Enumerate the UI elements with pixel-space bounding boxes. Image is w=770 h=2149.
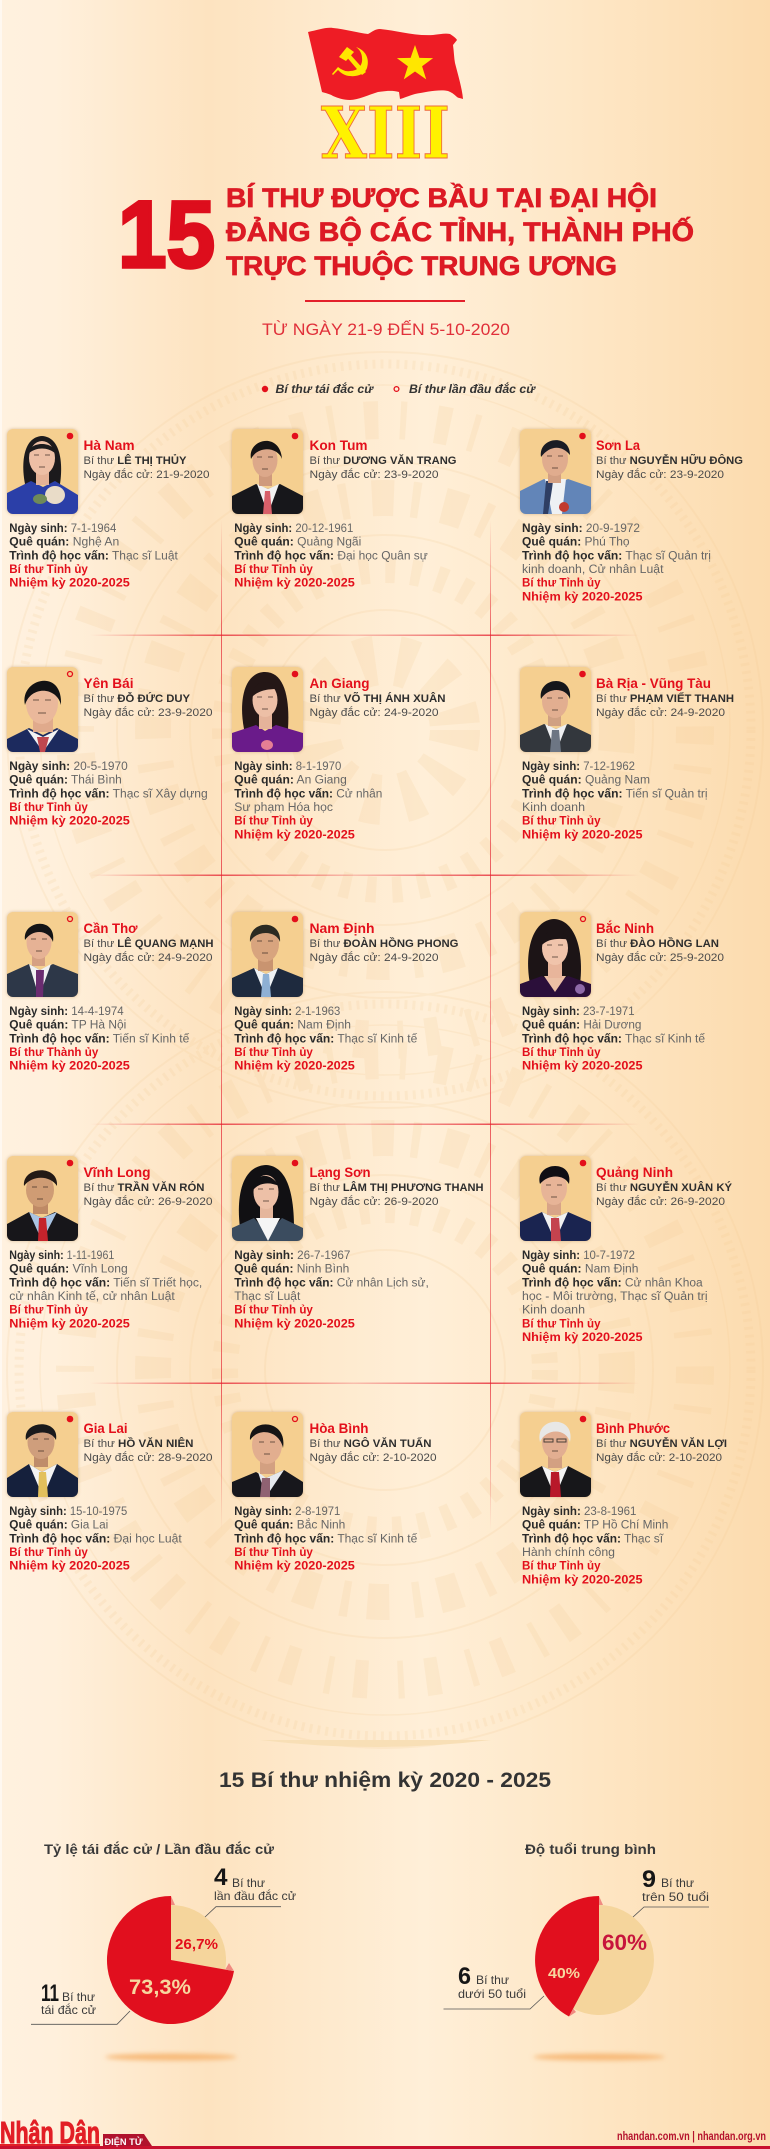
name and election date bbox=[310, 1437, 436, 1464]
biography bbox=[9, 1250, 202, 1330]
biography: học - Môi trường, Thạc sĩ Quản trị bbox=[522, 1291, 708, 1303]
biography: Nhiệm kỳ 2020-2025 bbox=[522, 1061, 643, 1073]
biography: Nhiệm kỳ 2020-2025 bbox=[522, 1574, 643, 1586]
biography: Bí thư Tỉnh ủy bbox=[522, 578, 601, 590]
biography: Quê quán: TP Hà Nội bbox=[9, 1020, 126, 1032]
tab: Điện tử: ĐIỆN TỬ bbox=[104, 2136, 143, 2147]
biography: Nhiệm kỳ 2020-2025 bbox=[522, 591, 643, 603]
biography: Bí thư Tỉnh ủy bbox=[9, 1547, 88, 1559]
biography: Ngày sinh: 1-11-1961 bbox=[9, 1250, 114, 1262]
legend: Bí thư lần đầu đắc cử bbox=[409, 381, 536, 396]
province: Bà Rịa - Vũng Tàu bbox=[596, 675, 711, 691]
card: Nam Định bbox=[232, 912, 459, 1073]
chart heading: Độ tuổi trung bình bbox=[525, 1841, 656, 1857]
name and election date bbox=[84, 454, 210, 481]
biography: Quê quán: Nam Định bbox=[522, 1264, 638, 1276]
photo bbox=[232, 912, 303, 997]
name and election date: Ngày đắc cử: 26-9-2020 bbox=[596, 1195, 725, 1208]
callout: 11 re-elected: 11 bbox=[41, 1980, 59, 2007]
card: Vĩnh Long bbox=[7, 1156, 212, 1330]
callout: 9 over 50: 9 bbox=[642, 1866, 656, 1893]
biography: Nhiệm kỳ 2020-2025 bbox=[234, 578, 355, 590]
biography: Bí thư Tỉnh ủy bbox=[9, 802, 88, 814]
province: Kon Tum bbox=[310, 437, 368, 453]
name and election date: Bí thư ĐOÀN HỒNG PHONG bbox=[310, 937, 459, 950]
name and election date: Ngày đắc cử: 24-9-2020 bbox=[310, 951, 438, 964]
statistics heading: 15 Bí thư nhiệm kỳ 2020 - 2025 bbox=[219, 1769, 551, 1792]
biography: Trình độ học vấn: Thạc sĩ Luật bbox=[9, 550, 179, 562]
biography: Bí thư Tỉnh ủy bbox=[234, 1547, 313, 1559]
biography: Quê quán: Bắc Ninh bbox=[234, 1519, 345, 1532]
biography: Trình độ học vấn: Đại học Quân sự bbox=[234, 550, 428, 562]
biography bbox=[522, 1250, 708, 1344]
name and election date: Ngày đắc cử: 24-9-2020 bbox=[84, 951, 212, 964]
legend bbox=[262, 381, 536, 396]
callout: 11 re-elected bbox=[31, 1980, 130, 2024]
name and election date: Bí thư HỒ VĂN NIÊN bbox=[84, 1437, 194, 1450]
logo: party flag and XIII bbox=[308, 28, 463, 175]
biography: Nhiệm kỳ 2020-2025 bbox=[9, 1061, 130, 1073]
biography: Trình độ học vấn: Tiến sĩ Quản trị bbox=[522, 788, 708, 800]
card: Bắc Ninh bbox=[520, 912, 724, 1073]
callout: 6 under 50: 6 bbox=[458, 1963, 471, 1990]
biography: Quê quán: Thái Bình bbox=[9, 775, 122, 787]
icon: star bbox=[397, 45, 433, 79]
name and election date bbox=[596, 937, 724, 964]
biography: Ngày sinh: 23-7-1971 bbox=[522, 1006, 634, 1018]
biography bbox=[9, 523, 179, 590]
biography: Bí thư Tỉnh ủy bbox=[234, 1047, 313, 1059]
chart heading: Tỷ lệ tái đắc cử / Lần đầu đắc cử bbox=[44, 1840, 275, 1857]
biography: Trình độ học vấn: Cử nhân Khoa bbox=[522, 1278, 703, 1290]
biography bbox=[522, 1006, 706, 1073]
biography: Kinh doanh bbox=[522, 802, 585, 814]
biography: Nhiệm kỳ 2020-2025 bbox=[234, 1318, 355, 1330]
name and election date: Bí thư NGUYỄN HỮU ĐÔNG bbox=[596, 454, 743, 467]
biography bbox=[234, 1506, 418, 1573]
biography: Bí thư Tỉnh ủy bbox=[234, 816, 313, 828]
province: Bắc Ninh bbox=[596, 919, 654, 936]
biography: Bí thư Tỉnh ủy bbox=[522, 816, 601, 828]
biography: Nhiệm kỳ 2020-2025 bbox=[9, 816, 130, 828]
icon: flag bbox=[308, 28, 463, 100]
pie chart: 73,3% bbox=[129, 1976, 191, 1999]
biography: Trình độ học vấn: Thạc sĩ Quản trị bbox=[522, 550, 711, 562]
province: An Giang bbox=[310, 675, 370, 691]
biography: Bí thư Thành ủy bbox=[9, 1047, 99, 1059]
name and election date: Ngày đắc cử: 23-9-2020 bbox=[596, 468, 724, 481]
biography: Trình độ học vấn: Thạc sĩ Kinh tế bbox=[234, 1534, 418, 1546]
name and election date: Ngày đắc cử: 23-9-2020 bbox=[310, 468, 438, 481]
pie chart: 60% bbox=[602, 1930, 647, 1955]
biography: Trình độ học vấn: Thạc sĩ bbox=[522, 1534, 664, 1546]
province: Lạng Sơn bbox=[310, 1164, 370, 1180]
biography: Nhiệm kỳ 2020-2025 bbox=[522, 829, 643, 841]
biography: Ngày sinh: 20-9-1972 bbox=[522, 523, 640, 535]
province: Quảng Ninh bbox=[596, 1164, 673, 1180]
name and election date: Bí thư PHẠM VIẾT THANH bbox=[596, 692, 734, 705]
biography: Ngày sinh: 8-1-1970 bbox=[234, 761, 341, 773]
card: Yên Bái bbox=[7, 667, 212, 828]
name and election date: Ngày đắc cử: 24-9-2020 bbox=[596, 706, 725, 719]
biography bbox=[522, 1506, 668, 1586]
name and election date bbox=[310, 1181, 484, 1208]
biography: Ngày sinh: 7-12-1962 bbox=[522, 761, 635, 773]
biography bbox=[9, 761, 208, 828]
name and election date: Bí thư TRẦN VĂN RÓN bbox=[84, 1181, 204, 1194]
name and election date bbox=[310, 937, 459, 964]
footer bbox=[0, 2115, 770, 2149]
photo bbox=[7, 912, 78, 997]
name and election date bbox=[596, 454, 743, 481]
name and election date: Bí thư NGUYỄN VĂN LỢI bbox=[596, 1437, 727, 1450]
photo bbox=[232, 1412, 303, 1497]
biography: Trình độ học vấn: Cử nhân Lịch sử, bbox=[234, 1278, 429, 1290]
biography: Ngày sinh: 26-7-1967 bbox=[234, 1250, 350, 1262]
biography bbox=[522, 761, 708, 841]
title text: TRỰC THUỘC TRUNG ƯƠNG bbox=[226, 250, 617, 281]
callout: 4 first-time bbox=[205, 1864, 296, 1917]
biography: Sư phạm Hóa học bbox=[234, 802, 333, 814]
name and election date bbox=[84, 692, 212, 719]
biography: Ngày sinh: 7-1-1964 bbox=[9, 523, 117, 535]
card: An Giang bbox=[232, 667, 446, 841]
name and election date bbox=[596, 1437, 727, 1464]
name and election date: Ngày đắc cử: 2-10-2020 bbox=[310, 1451, 436, 1464]
biography: Ngày sinh: 2-8-1971 bbox=[234, 1506, 340, 1518]
biography: Bí thư Tỉnh ủy bbox=[9, 564, 88, 576]
biography: Quê quán: Nghệ An bbox=[9, 537, 119, 549]
biography: Trình độ học vấn: Thạc sĩ Kinh tế bbox=[234, 1034, 418, 1046]
biography: Quê quán: Ninh Bình bbox=[234, 1264, 349, 1276]
biography: Nhiệm kỳ 2020-2025 bbox=[9, 578, 130, 590]
biography: Ngày sinh: 20-5-1970 bbox=[9, 761, 128, 773]
callout: 4 first-time: lần đầu đắc cử bbox=[214, 1889, 296, 1903]
callout: 11 re-elected: tái đắc cử bbox=[41, 2003, 96, 2017]
name and election date bbox=[84, 1181, 212, 1208]
biography: Kinh doanh bbox=[522, 1305, 585, 1317]
photo bbox=[7, 429, 78, 514]
biography: Bí thư Tỉnh ủy bbox=[234, 1305, 313, 1317]
biography: Bí thư Tỉnh ủy bbox=[234, 564, 313, 576]
biography: Nhiệm kỳ 2020-2025 bbox=[522, 1332, 643, 1344]
photo bbox=[232, 1156, 303, 1241]
legend: Bí thư tái đắc cử bbox=[276, 381, 374, 396]
name and election date: Bí thư LÊ QUANG MẠNH bbox=[84, 937, 214, 950]
biography bbox=[234, 761, 382, 841]
biography: Hành chính công bbox=[522, 1547, 615, 1559]
callout: 9 over 50: Bí thư bbox=[661, 1876, 694, 1890]
biography: cử nhân Kinh tế, cử nhân Luật bbox=[9, 1291, 176, 1303]
name and election date bbox=[84, 937, 214, 964]
photo bbox=[7, 1156, 78, 1241]
card: Lạng Sơn bbox=[232, 1156, 484, 1330]
title text: ĐẢNG BỘ CÁC TỈNH, THÀNH PHỐ bbox=[226, 215, 694, 247]
callout: 6 under 50: dưới 50 tuổi bbox=[458, 1987, 526, 2001]
logo: Nhân Dân: Nhân Dân bbox=[0, 2115, 100, 2149]
biography: Quê quán: An Giang bbox=[234, 775, 347, 787]
biography: Nhiệm kỳ 2020-2025 bbox=[234, 1061, 355, 1073]
callout: 9 over 50: trên 50 tuổi bbox=[642, 1890, 709, 1904]
province: Sơn La bbox=[596, 437, 640, 453]
name and election date: Ngày đắc cử: 21-9-2020 bbox=[84, 468, 210, 481]
province: Bình Phước bbox=[596, 1420, 670, 1436]
callout: 4 first-time: 4 bbox=[214, 1864, 228, 1891]
name and election date bbox=[310, 692, 446, 719]
card: Bà Rịa - Vũng Tàu bbox=[520, 667, 734, 841]
biography bbox=[234, 523, 428, 590]
pie chart: 26,7% bbox=[175, 1936, 218, 1953]
biography: Bí thư Tỉnh ủy bbox=[522, 1318, 601, 1330]
biography bbox=[9, 1506, 183, 1573]
pie chart bbox=[533, 1896, 665, 2060]
name and election date bbox=[310, 454, 457, 481]
name and election date: Ngày đắc cử: 28-9-2020 bbox=[84, 1451, 212, 1464]
big number 15: 15 bbox=[118, 182, 215, 288]
biography: Ngày sinh: 2-1-1963 bbox=[234, 1006, 340, 1018]
biography: Thạc sĩ Luật bbox=[234, 1291, 301, 1303]
title bbox=[118, 182, 694, 288]
province: Vĩnh Long bbox=[84, 1164, 150, 1180]
name and election date: Bí thư NGUYỄN XUÂN KÝ bbox=[596, 1181, 732, 1194]
callout: 9 over 50 bbox=[633, 1866, 709, 1917]
biography: Trình độ học vấn: Thạc sĩ Kinh tế bbox=[522, 1034, 706, 1046]
name and election date: Bí thư VÕ THỊ ÁNH XUÂN bbox=[310, 692, 446, 705]
photo bbox=[7, 667, 78, 752]
biography: Trình độ học vấn: Tiến sĩ Triết học, bbox=[9, 1278, 202, 1290]
name and election date bbox=[84, 1437, 212, 1464]
name and election date: Ngày đắc cử: 24-9-2020 bbox=[310, 706, 438, 719]
biography: Nhiệm kỳ 2020-2025 bbox=[234, 829, 355, 841]
biography: Trình độ học vấn: Thạc sĩ Xây dựng bbox=[9, 788, 208, 800]
name and election date: Bí thư DƯƠNG VĂN TRANG bbox=[310, 454, 457, 467]
biography: Trình độ học vấn: Cử nhân bbox=[234, 788, 382, 800]
biography: Nhiệm kỳ 2020-2025 bbox=[9, 1561, 130, 1573]
card: Gia Lai bbox=[7, 1412, 212, 1573]
photo bbox=[520, 667, 591, 752]
card: Quảng Ninh bbox=[520, 1156, 732, 1344]
card: Bình Phước bbox=[520, 1412, 727, 1586]
biography: kinh doanh, Cử nhân Luật bbox=[522, 564, 664, 576]
card: Kon Tum bbox=[232, 429, 457, 590]
chart: re-election ratio bbox=[31, 1840, 296, 2060]
date range: TỪ NGÀY 21-9 ĐẾN 5-10-2020 bbox=[262, 320, 510, 339]
card: Hòa Bình bbox=[232, 1412, 436, 1573]
biography: Bí thư Tỉnh ủy bbox=[9, 1305, 88, 1317]
biography: Quê quán: Vĩnh Long bbox=[9, 1264, 128, 1276]
congress number XIII: XIII bbox=[321, 91, 450, 175]
name and election date: Ngày đắc cử: 26-9-2020 bbox=[84, 1195, 212, 1208]
biography: Bí thư Tỉnh ủy bbox=[522, 1561, 601, 1573]
biography bbox=[234, 1006, 418, 1073]
biography: Nhiệm kỳ 2020-2025 bbox=[234, 1561, 355, 1573]
name and election date bbox=[596, 1181, 732, 1208]
card: Cần Thơ bbox=[7, 912, 214, 1073]
photo bbox=[520, 912, 591, 997]
biography: Ngày sinh: 10-7-1972 bbox=[522, 1250, 635, 1262]
name and election date: Ngày đắc cử: 23-9-2020 bbox=[84, 706, 212, 719]
photo bbox=[520, 1412, 591, 1497]
card: Sơn La bbox=[520, 429, 743, 603]
callout: 6 under 50 bbox=[444, 1963, 544, 2009]
tab: Điện tử bbox=[103, 2134, 152, 2147]
name and election date: Ngày đắc cử: 26-9-2020 bbox=[310, 1195, 438, 1208]
biography bbox=[234, 1250, 429, 1330]
biography: Trình độ học vấn: Tiến sĩ Kinh tế bbox=[9, 1034, 190, 1046]
photo bbox=[232, 667, 303, 752]
biography: Nhiệm kỳ 2020-2025 bbox=[9, 1318, 130, 1330]
province: Gia Lai bbox=[84, 1420, 128, 1436]
photo bbox=[7, 1412, 78, 1497]
biography: Ngày sinh: 14-4-1974 bbox=[9, 1006, 124, 1018]
name and election date: Ngày đắc cử: 2-10-2020 bbox=[596, 1451, 722, 1464]
biography: Ngày sinh: 23-8-1961 bbox=[522, 1506, 636, 1518]
province: Yên Bái bbox=[84, 675, 134, 691]
pie chart: 40% bbox=[548, 1965, 580, 1982]
biography bbox=[9, 1006, 190, 1073]
name and election date: Bí thư NGÔ VĂN TUẤN bbox=[310, 1437, 432, 1450]
callout: 4 first-time: Bí thư bbox=[232, 1876, 265, 1890]
name and election date: Bí thư LÊ THỊ THỦY bbox=[84, 454, 187, 467]
title text: BÍ THƯ ĐƯỢC BẦU TẠI ĐẠI HỘI bbox=[226, 182, 657, 213]
pie chart bbox=[105, 1896, 237, 2060]
biography: Quê quán: Phú Thọ bbox=[522, 537, 630, 549]
province: Cần Thơ bbox=[84, 920, 138, 936]
biography: Quê quán: TP Hồ Chí Minh bbox=[522, 1520, 668, 1532]
province: Nam Định bbox=[310, 920, 374, 936]
province: Hòa Bình bbox=[310, 1420, 368, 1436]
name and election date: Bí thư ĐỖ ĐỨC DUY bbox=[84, 692, 191, 705]
name and election date: Bí thư LÂM THỊ PHƯƠNG THANH bbox=[310, 1181, 484, 1194]
chart: average age bbox=[444, 1841, 709, 2060]
icon: hammer and sickle bbox=[332, 47, 368, 76]
name and election date: Ngày đắc cử: 25-9-2020 bbox=[596, 951, 724, 964]
biography: Trình độ học vấn: Đại học Luật bbox=[9, 1534, 183, 1546]
biography: Quê quán: Quảng Ngãi bbox=[234, 537, 361, 549]
biography: Ngày sinh: 20-12-1961 bbox=[234, 523, 353, 535]
title text bbox=[226, 182, 694, 281]
photo bbox=[520, 429, 591, 514]
biography: Quê quán: Gia Lai bbox=[9, 1520, 108, 1532]
biography bbox=[522, 523, 711, 603]
biography: Quê quán: Hải Dương bbox=[522, 1020, 641, 1032]
name and election date: Bí thư ĐÀO HỒNG LAN bbox=[596, 937, 719, 950]
biography: Ngày sinh: 15-10-1975 bbox=[9, 1506, 127, 1518]
biography: Bí thư Tỉnh ủy bbox=[522, 1047, 601, 1059]
callout: 6 under 50: Bí thư bbox=[476, 1973, 509, 1987]
name and election date bbox=[596, 692, 734, 719]
province: Hà Nam bbox=[84, 437, 134, 453]
biography: Quê quán: Nam Định bbox=[234, 1020, 351, 1032]
biography: Quê quán: Quảng Nam bbox=[522, 775, 650, 787]
callout: 11 re-elected: Bí thư bbox=[62, 1990, 95, 2004]
photo bbox=[520, 1156, 591, 1241]
photo bbox=[232, 429, 303, 514]
card: Hà Nam bbox=[7, 429, 210, 590]
